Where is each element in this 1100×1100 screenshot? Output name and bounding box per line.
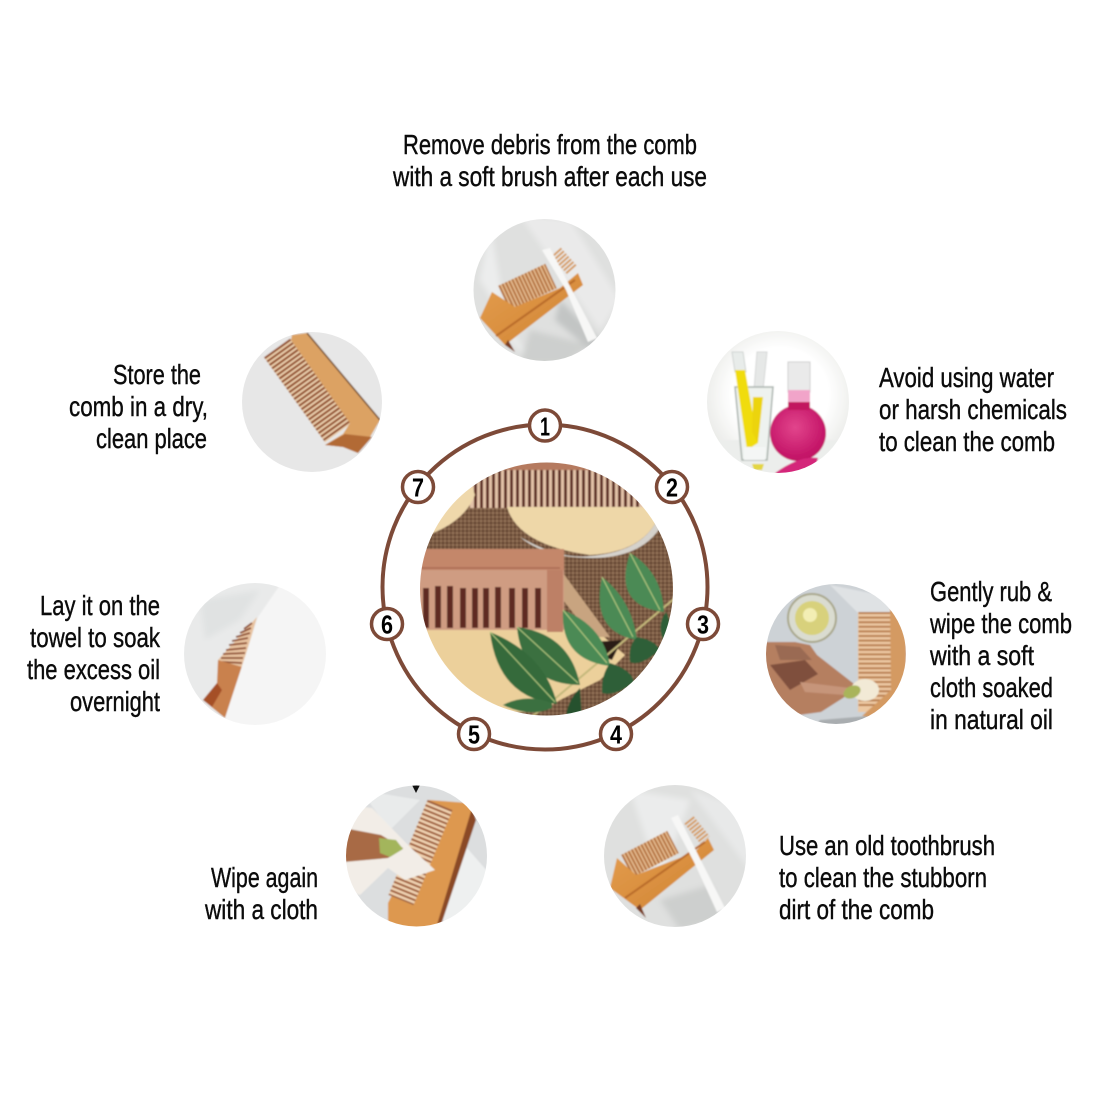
neem stem (530, 598, 675, 718)
badge 1 (530, 410, 560, 442)
heading text: step 3: Gently rub & (930, 576, 1052, 607)
photo: step 1 comb and soft brush (474, 219, 616, 361)
top-right wood slice (507, 507, 656, 555)
numbered ring (372, 410, 718, 750)
heading text: step 3: with a soft (929, 640, 1034, 671)
photo: step 6 comb on towel (184, 583, 326, 725)
badge 5 (458, 718, 490, 750)
heading text: step 1: Remove debris from the comb (403, 129, 697, 160)
photo: step 2 chemical flask and test tubes (707, 331, 849, 473)
heading text: step 7: clean place (96, 423, 207, 454)
photo: step 3 hand rubbing comb with oil cloth (766, 584, 906, 724)
badge 6: 6 (381, 610, 393, 640)
heading text: step 6 (27, 590, 161, 717)
badge 2 (656, 472, 688, 502)
wood chip (563, 573, 610, 637)
heading text: step 7 (69, 359, 208, 454)
badge 7: 7 (412, 472, 424, 502)
heading text: step 6: overnight (70, 686, 160, 717)
heading text: step 2: to clean the comb (879, 426, 1055, 457)
lower wood slice (420, 625, 625, 712)
badge 5: 5 (468, 720, 480, 750)
top comb (470, 462, 645, 508)
heading text: step 7: comb in a dry, (69, 391, 208, 422)
badge 3: 3 (697, 610, 709, 640)
heading text: step 1: with a soft brush after each use (392, 161, 707, 192)
heading text: step 1 (392, 129, 707, 192)
heading text: step 5 (204, 862, 318, 925)
wide comb (418, 549, 564, 632)
central photo: neem combs, wood slices and leaves (418, 460, 676, 718)
heading text: step 5: Wipe again (211, 862, 318, 893)
badge 4 (600, 718, 632, 750)
heading text: step 3: cloth soaked (930, 672, 1053, 703)
heading text: step 4: dirt of the comb (779, 894, 934, 925)
photo: step 5 hand wiping comb with cloth (346, 786, 487, 926)
photo: step 4 comb and old toothbrush (604, 785, 746, 927)
heading text: step 4: to clean the stubborn (779, 862, 987, 893)
heading text: step 5: with a cloth (204, 894, 318, 925)
neem leaves (490, 553, 670, 716)
badge 2: 2 (666, 472, 678, 502)
heading text: step 6: the excess oil (27, 654, 160, 685)
heading text: step 4: Use an old toothbrush (779, 830, 995, 861)
photo: step 7 comb on white towel (242, 332, 382, 472)
top-left wood slice (432, 487, 476, 534)
badge 6 (372, 608, 402, 640)
badge 1: 1 (540, 412, 550, 442)
heading text: step 3 (929, 576, 1072, 735)
heading text: step 6: Lay it on the (40, 590, 160, 621)
heading text: step 2: Avoid using water (879, 362, 1054, 393)
heading text: step 2 (879, 362, 1067, 457)
heading text: step 4 (779, 830, 995, 925)
heading text: step 3: in natural oil (930, 704, 1053, 735)
badge 3 (688, 608, 718, 640)
heading text: step 7: Store the (113, 359, 201, 390)
heading text: step 6: towel to soak (30, 622, 161, 653)
badge 7 (402, 472, 434, 502)
badge 4: 4 (610, 720, 622, 750)
